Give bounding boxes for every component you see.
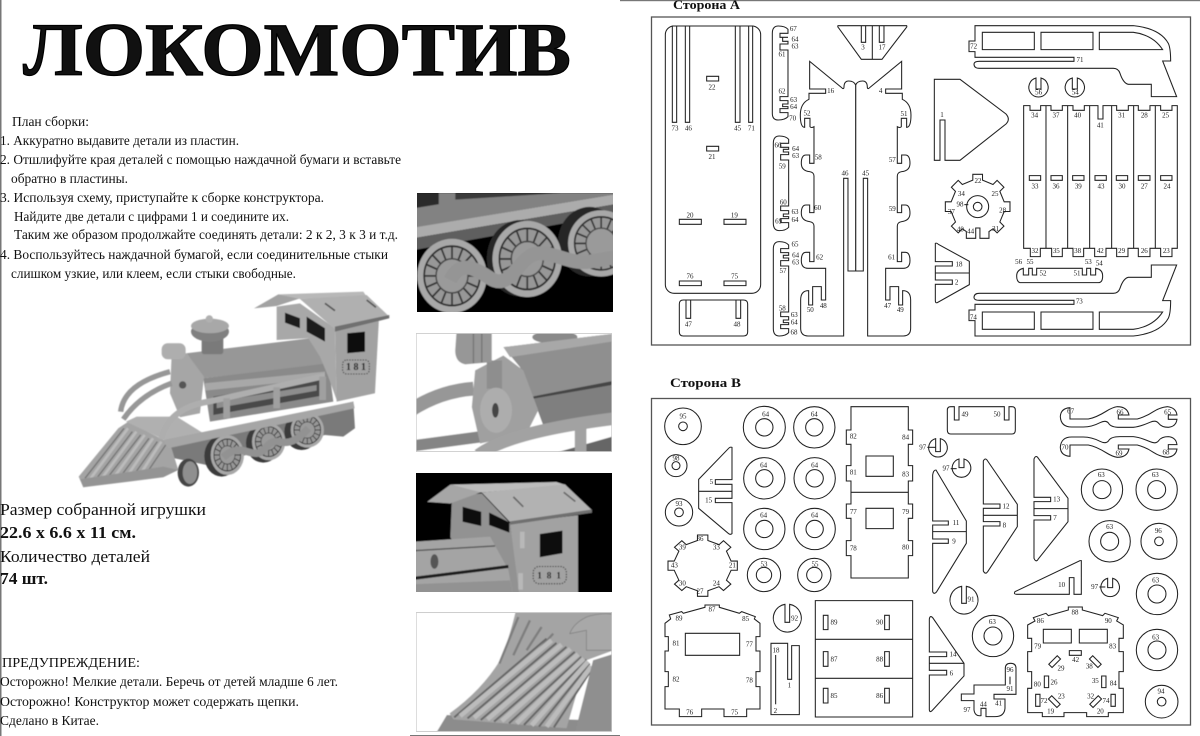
- side B left parts: 88: [876, 656, 884, 664]
- side A left parts: 64: [790, 103, 798, 111]
- side B left parts: 81: [850, 469, 857, 477]
- side B right parts: 79: [1034, 643, 1042, 651]
- side A right parts: 30: [1118, 183, 1126, 191]
- side A right parts: 29: [1118, 247, 1126, 255]
- side B left parts: 95: [680, 413, 687, 421]
- side B right parts: 67: [1067, 408, 1075, 416]
- side A right parts: 28: [1141, 112, 1148, 120]
- side B right parts: 69: [1115, 449, 1123, 457]
- side B left parts: 84: [902, 434, 910, 442]
- locomotive photo: [79, 292, 389, 487]
- side A right parts: 43: [1097, 183, 1105, 191]
- side A left parts: 67: [790, 25, 797, 33]
- side A right parts: 56: [1015, 258, 1023, 266]
- side A right parts: 51: [1073, 269, 1081, 277]
- side B left parts: 30: [679, 580, 686, 588]
- side A right parts: 72: [970, 43, 978, 51]
- side A left parts: 49: [897, 306, 904, 314]
- side A right parts: 52: [1039, 269, 1047, 277]
- side A right parts: 74: [970, 313, 977, 321]
- side B right parts: 94: [1157, 688, 1165, 696]
- side A left parts: 64: [791, 318, 798, 326]
- side B left parts: 21: [729, 562, 736, 570]
- side A right parts: 31: [992, 225, 1000, 233]
- side A left parts: 21: [709, 153, 716, 161]
- side B left parts: 87: [709, 606, 716, 614]
- side B left parts: 18: [772, 646, 780, 654]
- side A left parts: 64: [792, 251, 800, 259]
- side A left parts: 63: [791, 43, 799, 51]
- side A right parts: 28: [999, 207, 1007, 215]
- side B left parts: 64: [762, 410, 770, 418]
- side A left parts: 46: [841, 170, 849, 178]
- side A right parts: 73: [1076, 298, 1083, 306]
- side A left parts: 62: [816, 253, 824, 261]
- side A right parts: 34: [1031, 112, 1039, 120]
- side B left parts: 78: [746, 677, 753, 685]
- side B right parts: 97: [919, 443, 927, 451]
- side B right parts: 83: [1109, 643, 1117, 651]
- side A left parts: 57: [779, 267, 787, 275]
- side B right parts: 19: [1047, 708, 1055, 716]
- side A left parts: 60: [780, 198, 787, 206]
- side B left parts: 75: [731, 708, 739, 716]
- side A right parts: 2: [955, 278, 959, 286]
- side B right parts: 96: [1006, 666, 1014, 674]
- side B left parts: 77: [850, 508, 857, 516]
- side A left parts: 16: [827, 87, 835, 95]
- side B left parts: 76: [686, 708, 694, 716]
- assembly instructions: [0, 114, 401, 281]
- side B right parts: 38: [1086, 663, 1093, 671]
- side B right parts: 8: [1003, 521, 1007, 529]
- assembly instructions: Таким же образом продолжайте соединять детали: 2 к 2, 3 к 3 и т.д.: [14, 227, 398, 242]
- side B left parts: 1: [788, 682, 792, 690]
- side B left parts: 78: [850, 544, 857, 552]
- side A left parts: 45: [734, 124, 742, 132]
- side B left parts: 81: [673, 639, 680, 647]
- side A right parts: 35: [1053, 247, 1060, 255]
- side B left parts: 64: [760, 511, 768, 519]
- side A left parts: 63: [791, 311, 798, 319]
- side B right parts: 86: [1037, 617, 1044, 625]
- side A left parts: 63: [791, 208, 799, 216]
- side A left parts: 73: [672, 124, 679, 132]
- side B right parts: 74: [1102, 697, 1110, 705]
- side B right parts: 97: [1091, 583, 1099, 591]
- side B right parts: 12: [1002, 503, 1010, 511]
- side A left parts: 48: [820, 302, 827, 310]
- side B right parts: 63: [1152, 576, 1160, 584]
- side A left parts: 47: [685, 320, 692, 328]
- assembly instructions: План сборки:: [12, 114, 89, 129]
- side B left parts: 33: [713, 543, 720, 551]
- side B right parts: 63: [1152, 633, 1160, 641]
- cab wall: 1 8 1: [346, 362, 366, 373]
- assembly instructions: 3. Используя схему, приступайте к сборке конструктора.: [0, 190, 324, 205]
- side B right parts: 63: [1106, 523, 1114, 531]
- side A left parts: 71: [748, 124, 755, 132]
- photo crop: cab: [416, 473, 612, 592]
- side B left parts: 93: [676, 500, 683, 508]
- side B right parts: 80: [1034, 680, 1041, 688]
- side A left parts: 47: [884, 302, 892, 310]
- side A right parts: 31: [1118, 112, 1126, 120]
- side B right parts: 66: [1116, 408, 1124, 416]
- side B left parts: 83: [902, 470, 910, 478]
- side A right parts: 32: [1031, 247, 1039, 255]
- side A left parts: 20: [687, 211, 694, 219]
- side B left parts: 43: [671, 562, 678, 570]
- side B right parts: 90: [1105, 617, 1112, 625]
- side A right parts: 36: [1052, 183, 1060, 191]
- side A left parts: 59: [889, 205, 896, 213]
- side A right parts: 25: [1162, 112, 1170, 120]
- side A left parts: 65: [791, 240, 799, 248]
- warning: Сделано в Китае.: [0, 713, 99, 728]
- side B right parts: 9: [952, 538, 956, 546]
- side B left parts: 92: [791, 615, 799, 623]
- side A left parts: 63: [790, 96, 798, 104]
- side A right parts: 44: [967, 227, 975, 235]
- side B left parts: 80: [902, 544, 910, 552]
- side A right parts: 71: [1076, 56, 1084, 64]
- side B right parts: 7: [1053, 514, 1057, 522]
- side B right parts: 65: [1164, 408, 1172, 416]
- side A left parts: 57: [889, 156, 896, 164]
- warning: Осторожно! Конструктор может содержать щепки.: [0, 694, 299, 709]
- side A right parts: 34: [958, 190, 965, 198]
- side B right parts: 11: [953, 519, 960, 527]
- side A right parts: 26: [1141, 247, 1148, 255]
- side A right parts: 39: [1075, 183, 1082, 191]
- side B right parts: 68: [1162, 448, 1170, 456]
- warning: [0, 655, 338, 728]
- side B right parts: 10: [1058, 581, 1066, 589]
- side B left parts: 5: [710, 478, 714, 486]
- size and part count: 74 шт.: [0, 569, 48, 588]
- side B left parts: 39: [679, 544, 686, 552]
- panel: side A: [652, 17, 1190, 345]
- side B left parts: 82: [673, 676, 680, 684]
- side A right parts: 40: [957, 226, 964, 234]
- side A left parts: 63: [792, 152, 800, 160]
- side B left parts: 89: [830, 618, 838, 626]
- side A left parts: 22: [709, 83, 716, 91]
- side B left parts: 15: [705, 496, 713, 504]
- cab roof: [254, 292, 389, 332]
- side A left parts: 75: [731, 273, 739, 281]
- size and part count: 22.6 х 6.6 х 11 см.: [0, 523, 136, 542]
- side B right parts: 32: [1087, 693, 1095, 701]
- side B right parts: 63: [989, 618, 996, 626]
- side A left parts: 64: [791, 216, 799, 224]
- side A right parts: 1: [940, 111, 944, 119]
- side A left parts: 58: [779, 304, 786, 312]
- warning: ПРЕДУПРЕЖДЕНИЕ:: [2, 655, 140, 670]
- warning: Осторожно! Мелкие детали. Беречь от детей младше 6 лет.: [0, 674, 338, 689]
- assembly instructions: слишком узкие, или клеем, если стыки свободные.: [11, 266, 296, 281]
- side B right parts: 13: [1053, 495, 1061, 503]
- side A left parts: 52: [803, 109, 811, 117]
- assembly instructions: Найдите две детали с цифрами 1 и соедините их.: [14, 209, 289, 224]
- side A left parts: 51: [900, 110, 908, 118]
- side A right parts: 53: [1085, 258, 1092, 266]
- cab wall: [277, 303, 379, 402]
- side A left parts: 63: [792, 258, 800, 266]
- side A left parts: 64: [791, 36, 799, 44]
- side B left parts: [665, 406, 913, 717]
- size and part count: Количество деталей: [0, 547, 150, 566]
- side A right parts: 55: [1026, 258, 1034, 266]
- side A left parts: 19: [731, 211, 738, 219]
- side A left parts: 46: [685, 124, 692, 132]
- panel: side B: [652, 398, 1190, 725]
- side B left parts: 36: [697, 535, 704, 543]
- assembly instructions: обратно в пластины.: [11, 171, 128, 186]
- side B right parts: 20: [1097, 708, 1104, 716]
- assembly instructions: 1. Аккуратно выдавите детали из пластин.: [0, 133, 239, 148]
- side B left parts: 98: [673, 455, 680, 463]
- side B left parts: 90: [876, 618, 884, 626]
- side A right parts: 18: [956, 260, 963, 268]
- side A left parts: 62: [778, 88, 786, 96]
- side B right parts: 44: [980, 700, 987, 708]
- photo crop: front plate: [416, 333, 612, 452]
- side A left parts: 69: [775, 218, 783, 226]
- side A right parts: 23: [1163, 247, 1170, 255]
- side B left parts: 24: [713, 580, 720, 588]
- side B right parts: 72: [1040, 697, 1048, 705]
- smokestack: [191, 315, 229, 354]
- side A left parts: 60: [814, 204, 822, 212]
- side A left parts: [665, 25, 911, 337]
- side B right parts: 70: [1061, 444, 1069, 452]
- side B right parts: 41: [995, 699, 1003, 707]
- side B right parts: 14: [950, 651, 957, 659]
- side B left parts: 85: [742, 615, 750, 623]
- side A right parts: 22: [975, 177, 982, 185]
- side B right parts: 84: [1110, 679, 1117, 687]
- side B right parts: 63: [1152, 471, 1159, 479]
- side B left parts: 64: [811, 511, 819, 519]
- side A right parts: 27: [1141, 183, 1148, 191]
- side B left parts: 64: [760, 461, 768, 469]
- side A right parts: [934, 26, 1177, 336]
- side B left parts: 2: [774, 707, 778, 715]
- side B right parts: 6: [950, 669, 954, 677]
- assembly instructions: 2. Отшлифуйте края деталей с помощью наждачной бумаги и вставьте: [0, 152, 401, 167]
- side B left parts: 87: [830, 656, 838, 664]
- side A left parts: 70: [789, 114, 797, 122]
- side B left parts: 77: [746, 640, 753, 648]
- side B right parts: 35: [1092, 677, 1099, 685]
- side A left parts: 76: [687, 273, 694, 281]
- side B left parts: 64: [811, 411, 818, 419]
- side B right parts: 23: [1058, 693, 1065, 701]
- side A right parts: 37: [948, 208, 955, 216]
- side A left parts: 50: [807, 306, 814, 314]
- side B right parts: 29: [1057, 664, 1065, 672]
- side A left parts: 64: [792, 145, 800, 153]
- side A right parts: 37: [1052, 112, 1060, 120]
- side A right parts: 25: [992, 190, 999, 198]
- side B left parts: 53: [760, 560, 768, 568]
- side A right parts: 56: [1035, 88, 1043, 96]
- title: ЛОКОМОТИВ: [23, 9, 571, 92]
- size and part count: Размер собранной игрушки: [0, 500, 206, 519]
- side A right parts: 54: [1072, 88, 1079, 96]
- side B left parts: 89: [676, 614, 683, 622]
- side A left parts: 4: [879, 87, 883, 95]
- side B right parts: 91: [1006, 685, 1014, 693]
- side A right parts: 38: [1074, 247, 1082, 255]
- side B right parts: 63: [1098, 471, 1105, 479]
- photo crop: wheels: [417, 193, 613, 312]
- photo crop: cowcatcher: [416, 612, 612, 732]
- side B right parts: 91: [968, 596, 975, 604]
- side B right parts: 42: [1072, 656, 1080, 664]
- side A right parts: 24: [1163, 183, 1171, 191]
- side B left parts: 27: [697, 588, 704, 596]
- side B right parts: 97: [943, 465, 950, 473]
- side B right parts: 50: [994, 410, 1001, 418]
- side B left parts: 85: [830, 692, 838, 700]
- side B right parts: [919, 407, 1178, 718]
- side A left parts: 61: [888, 253, 896, 261]
- side A right parts: 54: [1096, 259, 1103, 267]
- side A left parts: 45: [862, 170, 870, 178]
- side B left parts: 86: [876, 692, 884, 700]
- side A right parts: 98: [957, 201, 964, 209]
- side B right parts: 26: [1050, 679, 1058, 687]
- side B left parts: 79: [902, 508, 910, 516]
- size and part count: [0, 500, 206, 588]
- side A left parts: 66: [774, 141, 782, 149]
- side B left parts: 82: [850, 432, 857, 440]
- side A left parts: 59: [779, 162, 786, 170]
- side B right parts: 49: [962, 410, 969, 418]
- photo crop: cab: 1 8 1: [537, 572, 562, 582]
- side A left parts: 3: [861, 44, 865, 52]
- side A right parts: 42: [1097, 247, 1104, 255]
- side B right parts: 97: [964, 706, 971, 714]
- side A left parts: 61: [778, 50, 786, 58]
- side A left parts: 68: [790, 329, 798, 337]
- assembly instructions: 4. Воспользуйтесь наждачной бумагой, если соединительные стыки: [0, 247, 388, 262]
- side A left parts: 17: [878, 44, 886, 52]
- side A right parts: 33: [1031, 183, 1039, 191]
- side B right parts: 96: [1155, 527, 1162, 535]
- side B left parts: 55: [811, 560, 819, 568]
- side B right parts: 88: [1071, 609, 1079, 617]
- side B left parts: 64: [811, 461, 819, 469]
- side A right parts: 40: [1074, 112, 1082, 120]
- side A right parts: 41: [1097, 122, 1104, 130]
- side A left parts: 58: [815, 154, 822, 162]
- heading: side B: Сторона В: [670, 375, 741, 390]
- side A left parts: 48: [733, 320, 741, 328]
